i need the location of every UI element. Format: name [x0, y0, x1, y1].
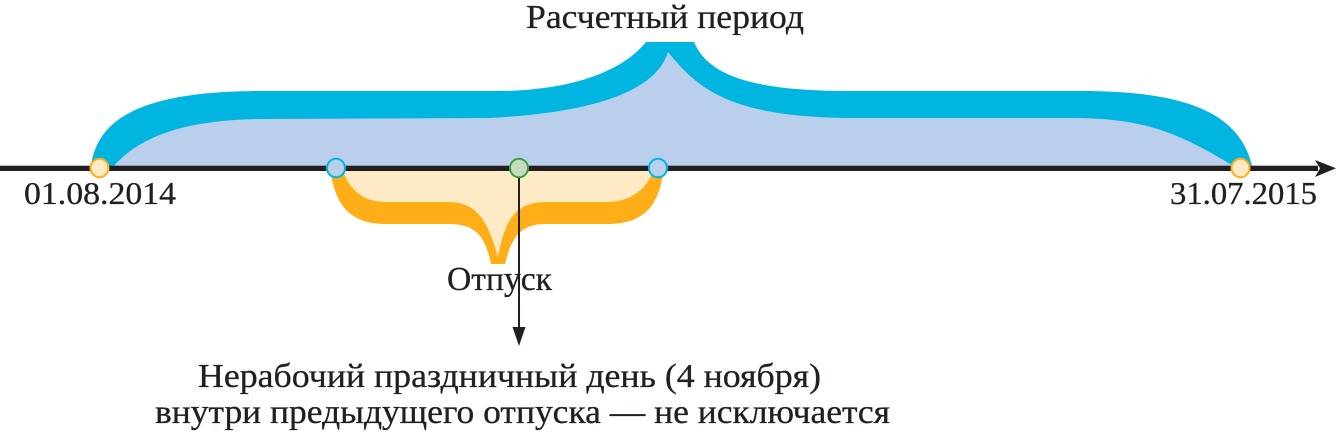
start date label: 01.08.2014: [24, 175, 176, 211]
end date marker: [1232, 159, 1250, 177]
end date label: 31.07.2015: [1170, 175, 1317, 211]
vacation area fill: [340, 171, 656, 260]
billing period area fill: [104, 46, 1244, 168]
holiday note: внутри предыдущего отпуска — не исключается: [155, 394, 890, 431]
holiday pointer arrow: [512, 178, 526, 346]
billing period brace: [91, 42, 1252, 167]
holiday note: Нерабочий праздничный день (4 ноября): [198, 358, 821, 395]
vacation end marker: [649, 159, 667, 177]
vacation start marker: [327, 159, 345, 177]
timeline axis arrow: [0, 160, 1336, 177]
vacation brace: [331, 174, 663, 264]
start date marker: [90, 159, 108, 177]
heading: billing period: Расчетный период: [526, 0, 804, 36]
holiday note: [155, 358, 890, 431]
holiday marker: [510, 159, 528, 177]
vacation label: Отпуск: [447, 261, 552, 298]
